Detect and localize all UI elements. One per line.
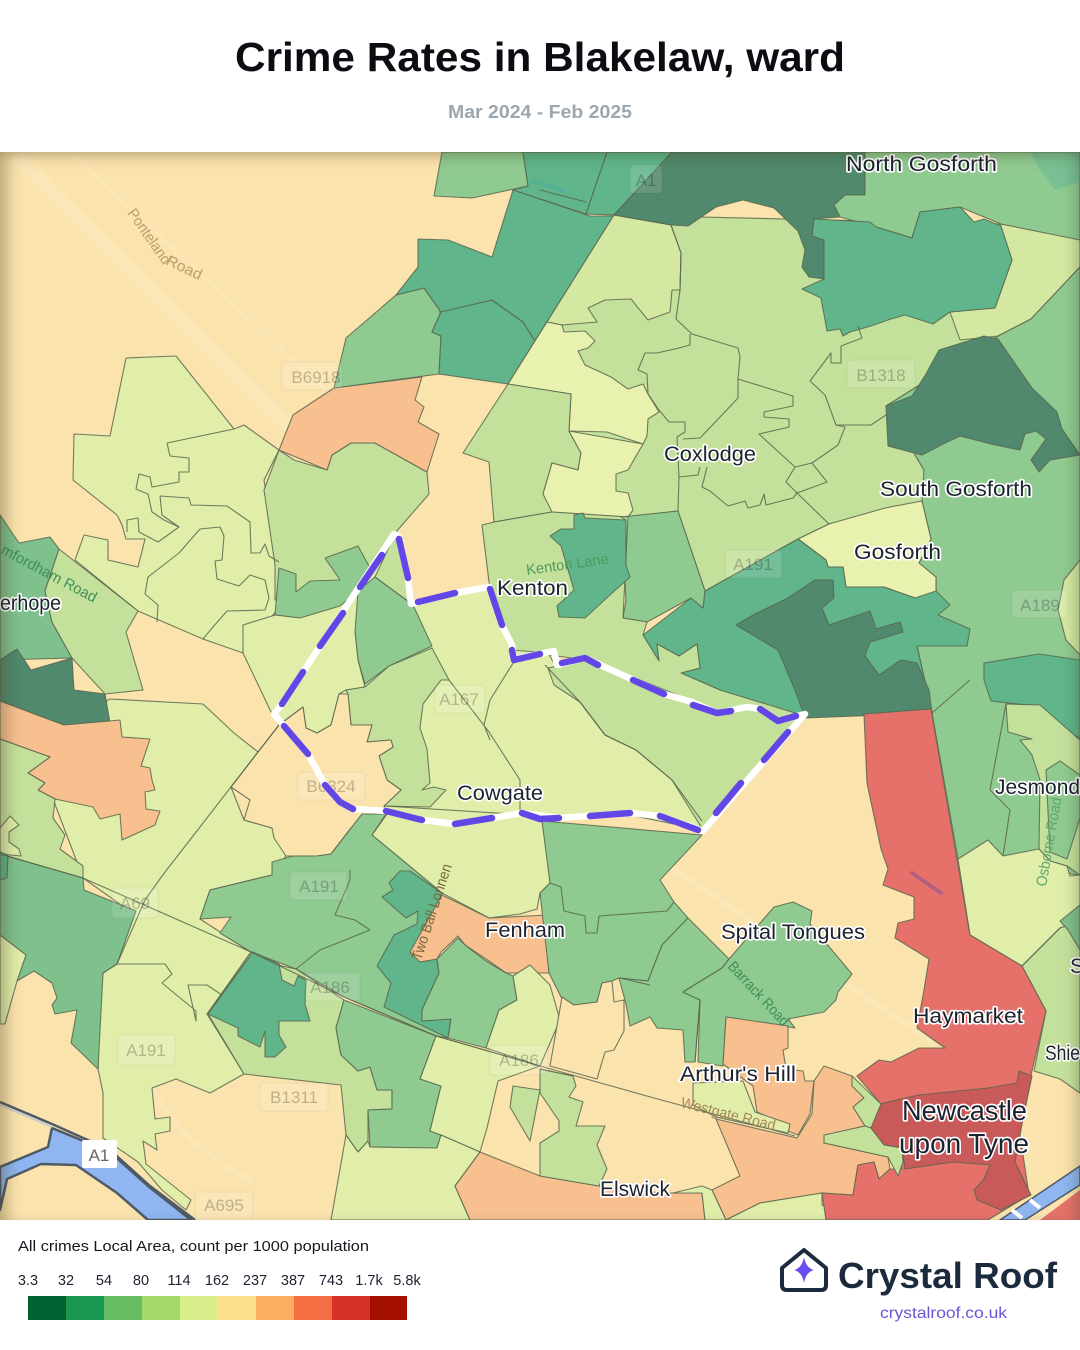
- road names: Barrack Road: [724, 958, 792, 1030]
- road shields: [112, 165, 1068, 1220]
- legend: colour scale: 387: [281, 1273, 305, 1289]
- place names: Cowgate: [457, 782, 543, 805]
- legend: colour scale: [18, 1273, 421, 1320]
- road shields: B6918: [291, 368, 341, 387]
- road names: [0, 206, 1066, 1134]
- subtitle: date range: Mar 2024 - Feb 2025: [448, 102, 632, 122]
- icon: house with sparkle: [782, 1250, 826, 1290]
- shield: A1: [82, 1140, 117, 1168]
- area group: central Newcastle fringe: [510, 821, 890, 1220]
- place names: South Gosforth: [880, 478, 1032, 501]
- internal boundary lines: [0, 190, 1060, 1136]
- river tyne east: [1000, 1166, 1080, 1220]
- legend: colour scale: 114: [167, 1273, 191, 1289]
- place names: upon Tyne: [899, 1128, 1029, 1159]
- place names: Spital Tongues: [721, 921, 865, 944]
- legend: colour scale: 237: [243, 1273, 267, 1289]
- logo: Crystal Roof: Crystal Roof: [838, 1255, 1058, 1296]
- road shields: A186: [499, 1051, 539, 1070]
- road shields: A167: [439, 690, 479, 709]
- road shields: A186: [310, 978, 350, 997]
- place names: Gosforth: [854, 541, 941, 564]
- road shields: B6324: [306, 777, 356, 796]
- water patches: [530, 152, 1080, 193]
- area group: Blakelaw ward interior: [243, 532, 805, 918]
- legend: colour scale: 743: [319, 1273, 343, 1289]
- road names: mfordham Road: [0, 542, 100, 606]
- map: crime choropleth: [0, 152, 1080, 1220]
- road names: Kenton Lane: [525, 551, 610, 579]
- road names: Osborne Road: [1033, 796, 1066, 888]
- legend: colour scale: 162: [205, 1273, 229, 1289]
- place names: North Gosforth: [846, 153, 997, 176]
- road shields: B1318: [856, 366, 906, 385]
- place names: Coxlodge: [664, 443, 756, 466]
- website link text: crystalroof.co.uk: [880, 1305, 1008, 1322]
- place names: Arthur's Hill: [680, 1063, 796, 1086]
- area group: east and Jesmond: [798, 267, 1080, 1093]
- place names: erhope: [0, 592, 61, 615]
- place names: Haymarket: [913, 1005, 1023, 1028]
- road shields: A191: [299, 877, 339, 896]
- road shields: A189: [1020, 596, 1060, 615]
- shield: A1: A1: [89, 1146, 109, 1165]
- area group: centre north green: [482, 511, 970, 720]
- area group: west of ward: [73, 152, 672, 653]
- title: Crime Rates in Blakelaw, ward: [235, 34, 845, 80]
- road names: Road: [163, 252, 205, 284]
- legend: colour scale: 32: [58, 1273, 74, 1289]
- place names: [0, 153, 1080, 1201]
- place names: Elswick: [600, 1178, 670, 1201]
- legend: colour scale: 1.7k: [355, 1273, 383, 1289]
- place names: Newcastle: [902, 1095, 1027, 1126]
- road names: Two Ball Lonnen: [409, 862, 456, 962]
- road shields: A69: [120, 894, 150, 913]
- legend: colour scale: 80: [133, 1273, 149, 1289]
- area group: city centre red: [822, 709, 1080, 1220]
- legend: colour scale: 54: [96, 1273, 112, 1289]
- place names: Kenton: [497, 577, 568, 600]
- legend: colour scale: 5.8k: [393, 1273, 421, 1289]
- road shields: A1: [636, 171, 656, 190]
- legend title: All crimes Local Area, count per 1000 population: [18, 1239, 369, 1255]
- road shields: B1311: [270, 1088, 318, 1107]
- choropleth areas: [0, 152, 1080, 1220]
- road names: Ponteland: [124, 206, 174, 268]
- road shields: A191: [733, 555, 773, 574]
- place names: Jesmond: [995, 776, 1080, 799]
- logo: Crystal Roof: [782, 1250, 1058, 1296]
- area group: south west: [0, 515, 705, 1220]
- river tyne west: [0, 1102, 195, 1220]
- road shields: A191: [126, 1041, 166, 1060]
- area group: north and Coxlodge: [463, 152, 1080, 591]
- road shields: A695: [204, 1196, 244, 1215]
- ward boundary: Blakelaw: [274, 534, 805, 831]
- legend: colour scale: 3.3: [18, 1273, 38, 1289]
- tunnel road mark: [912, 873, 941, 893]
- place names: Fenham: [485, 919, 565, 942]
- road names: Westgate Road: [679, 1094, 777, 1134]
